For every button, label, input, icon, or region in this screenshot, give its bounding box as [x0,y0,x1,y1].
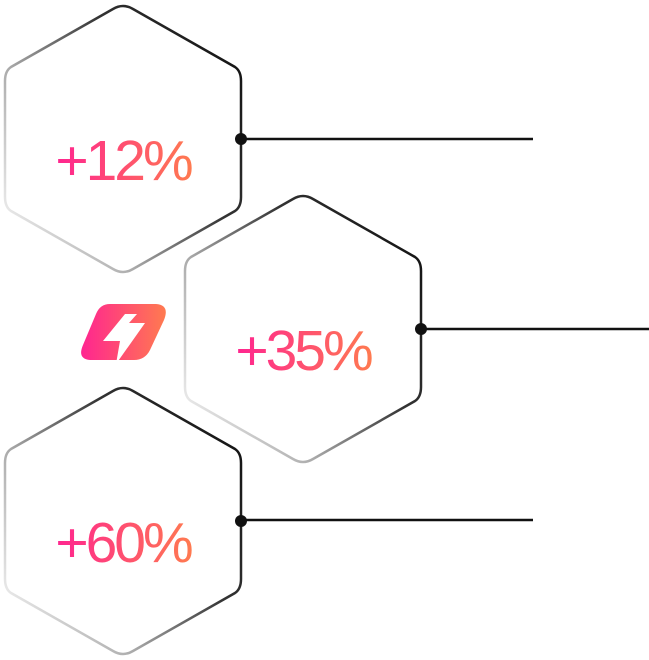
hexagon 2 [185,196,427,462]
connector lines [241,139,649,520]
hexagon 1 [5,6,247,272]
hexagon 3: +60% [55,511,192,575]
hexagon 3 [5,388,247,654]
hexagon 1: +12% [55,129,192,193]
logo: lightning mark [81,304,166,364]
hexagon 2: +35% [235,319,372,383]
